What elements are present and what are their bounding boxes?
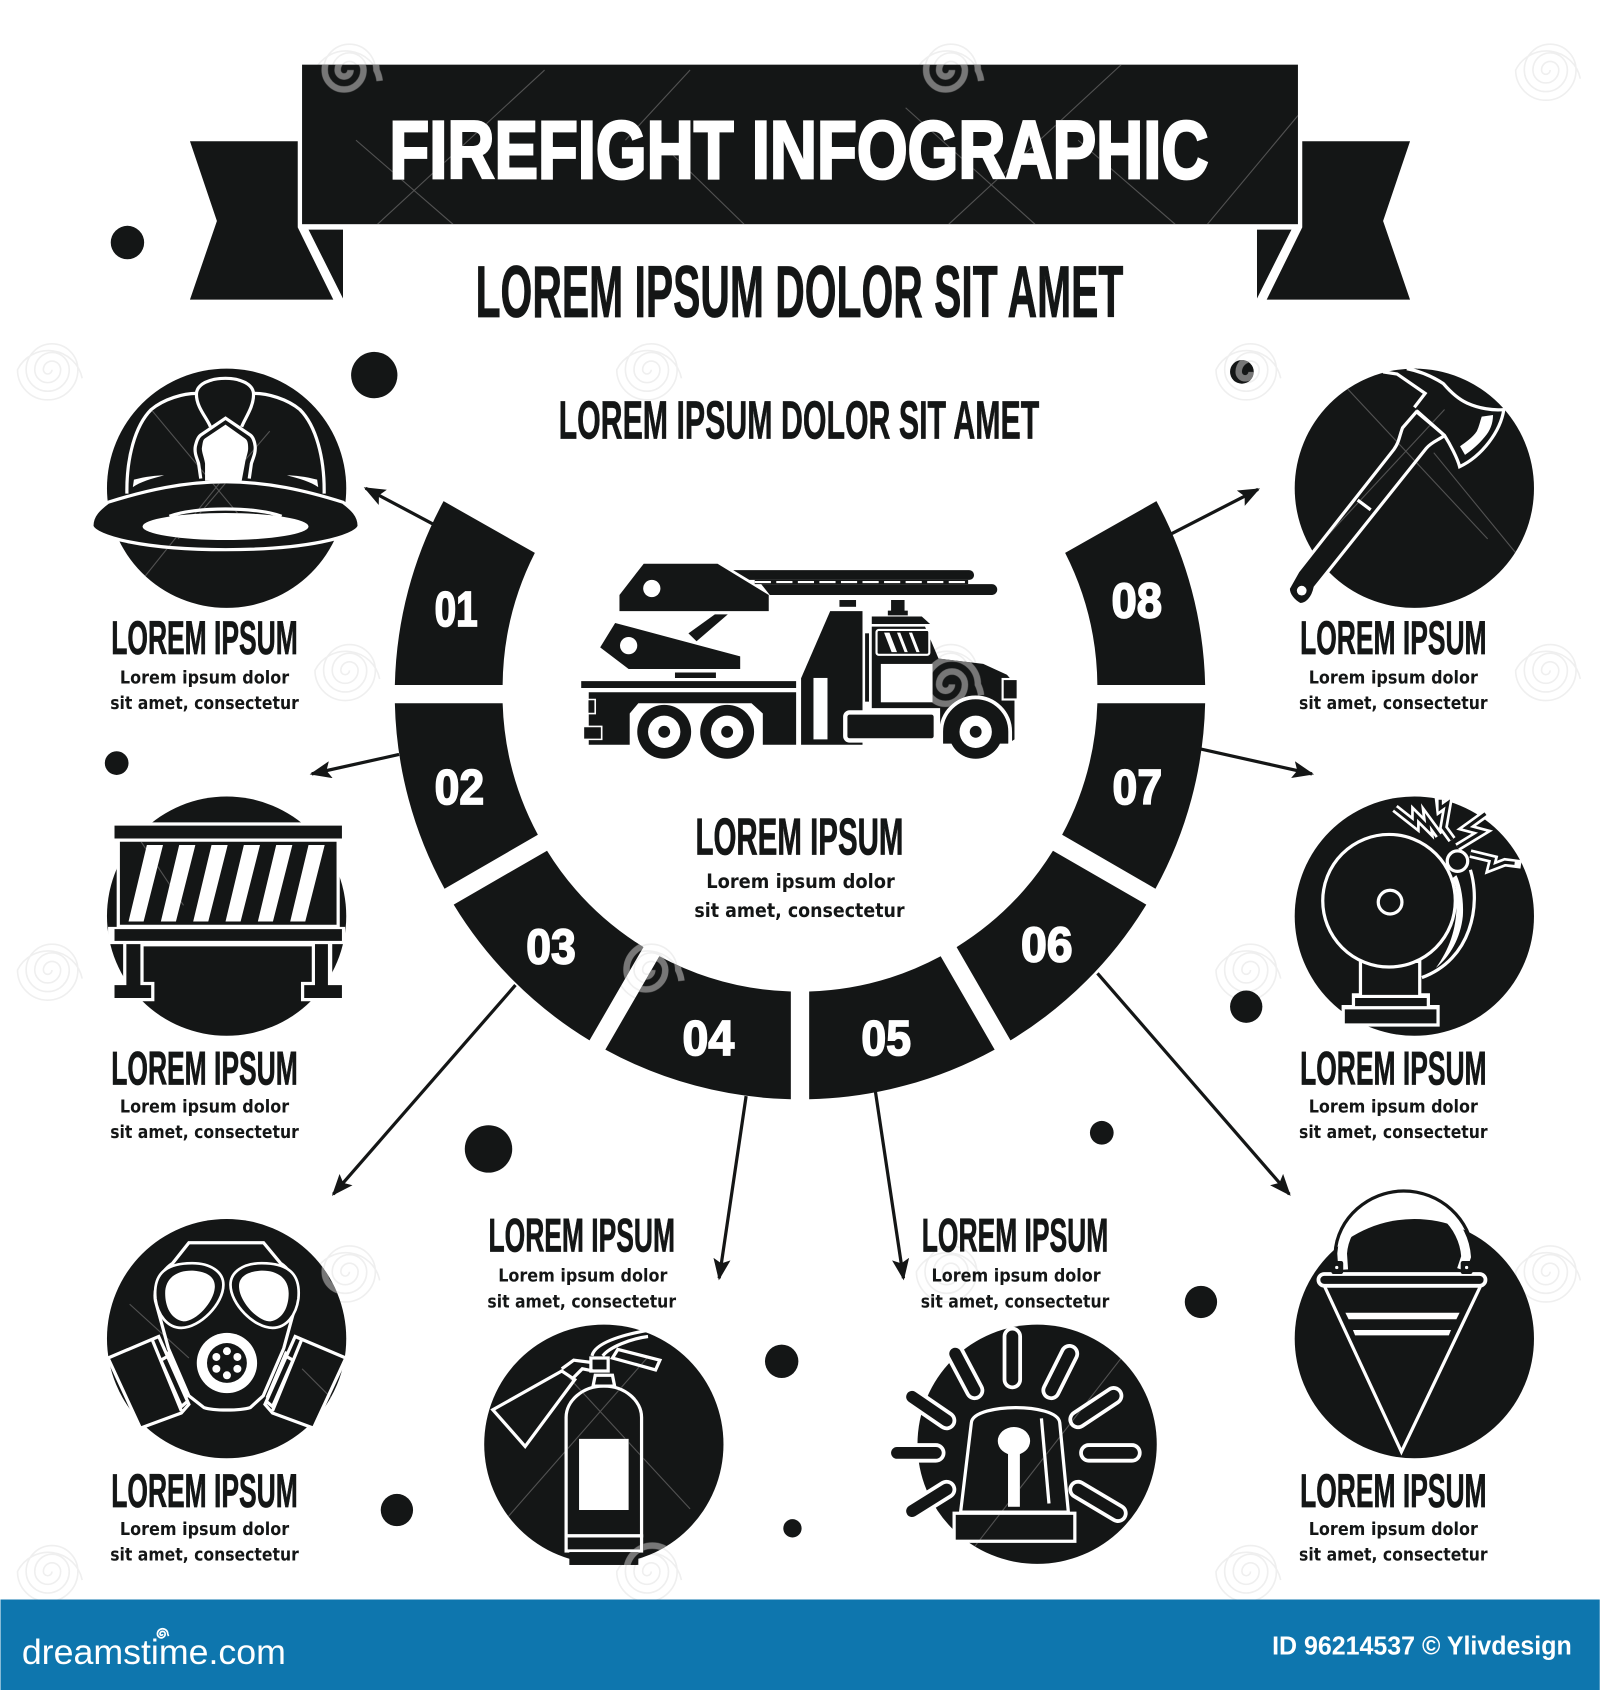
- center body: Lorem ipsum dolor: [706, 870, 895, 893]
- lower boom: [600, 623, 740, 669]
- label 3: sit amet, consectetur: [110, 1545, 299, 1566]
- label 6: sit amet, consectetur: [1299, 1545, 1488, 1566]
- handle outer line: [1335, 1191, 1473, 1270]
- right canister: [265, 1336, 346, 1428]
- label 2: [110, 1042, 299, 1143]
- handle white band: [1342, 1199, 1466, 1270]
- rear wheel 1: [637, 705, 691, 759]
- label 6: [1299, 1465, 1488, 1566]
- icon: bucket: [1295, 1191, 1534, 1458]
- segment 02: [395, 703, 538, 889]
- label 5: LOREM IPSUM: [922, 1209, 1108, 1262]
- icon: helmet: [92, 369, 359, 608]
- label 7: sit amet, consectetur: [1299, 1122, 1488, 1143]
- window: [877, 630, 929, 655]
- icon: fire truck: [581, 564, 1018, 759]
- icon: axe: [1288, 369, 1534, 608]
- filter: [197, 1333, 257, 1393]
- label 5: [921, 1209, 1110, 1312]
- ribbon right tail: [1267, 141, 1410, 300]
- segment 05: 05: [861, 1010, 911, 1066]
- arm: [1436, 875, 1463, 968]
- deck: [581, 673, 796, 688]
- rim: [1318, 1274, 1485, 1286]
- rays: [897, 1336, 1132, 1513]
- strut: [688, 614, 728, 641]
- segment 03: [454, 851, 643, 1040]
- nozzle: [493, 1371, 575, 1446]
- sparks: [1395, 790, 1521, 868]
- arrow 03: [333, 985, 515, 1194]
- segment 02: 02: [435, 759, 484, 815]
- head outlines: [1407, 369, 1504, 467]
- comb: [196, 378, 254, 427]
- label 4: Lorem ipsum dolor: [498, 1266, 668, 1287]
- label 4: sit amet, consectetur: [487, 1291, 676, 1312]
- segment 06: 06: [1021, 916, 1073, 972]
- bell stand: [1343, 961, 1438, 1025]
- blade highlight: [1460, 415, 1493, 455]
- label 5: Lorem ipsum dolor: [931, 1266, 1101, 1287]
- arrow 04: [719, 1096, 746, 1278]
- arrow 08: [1172, 489, 1258, 534]
- white clearing: [108, 822, 345, 1001]
- label 7: Lorem ipsum dolor: [1309, 1096, 1478, 1117]
- arrow 01: [366, 488, 435, 525]
- chassis: [589, 692, 796, 745]
- segment 04: 04: [683, 1010, 735, 1066]
- label 1: Lorem ipsum dolor: [120, 667, 289, 688]
- title ribbon: [190, 65, 1410, 300]
- brim opening: [143, 513, 309, 540]
- section heading: LOREM IPSUM DOLOR SIT AMET: [559, 391, 1039, 451]
- segment 06: [957, 851, 1146, 1040]
- icon: bell: [1295, 790, 1534, 1036]
- rays outline: [897, 1336, 1132, 1513]
- footer band: [0, 1599, 1600, 1690]
- handle hole: [1297, 586, 1307, 595]
- keyhole: [998, 1427, 1030, 1507]
- label 3: [110, 1465, 299, 1566]
- ribbon left fold: [309, 230, 343, 299]
- dome wedges: [133, 475, 318, 487]
- segment 01: 01: [435, 581, 478, 637]
- label 7: [1299, 1042, 1488, 1143]
- center heading: LOREM IPSUM: [695, 808, 903, 866]
- center text block: [694, 808, 905, 922]
- head body: [1397, 369, 1504, 467]
- side step: [845, 712, 936, 740]
- head band: [1383, 372, 1425, 407]
- arrow 02: [312, 754, 399, 774]
- label 4: [487, 1209, 676, 1312]
- handle: [592, 1330, 649, 1356]
- title: FIREFIGHT INFOGRAPHIC: [389, 105, 1208, 196]
- arrow 07: [1201, 749, 1312, 774]
- cab: [872, 627, 1014, 744]
- label 8: sit amet, consectetur: [1299, 693, 1488, 714]
- bands: [1345, 1313, 1460, 1335]
- label 3: LOREM IPSUM: [111, 1465, 298, 1518]
- bell knob: [1447, 851, 1468, 871]
- segment 03: 03: [526, 919, 576, 975]
- icon: barrier: [107, 796, 346, 1036]
- icon: siren: [897, 1325, 1157, 1564]
- brim: [92, 482, 359, 550]
- cylinder: [566, 1386, 642, 1536]
- footer credit: ID 96214537 © Ylivdesign: [1272, 1632, 1572, 1660]
- label 2: LOREM IPSUM: [111, 1042, 298, 1095]
- label 1: [110, 612, 299, 714]
- ladder: [733, 570, 997, 595]
- ribbon main band: [302, 65, 1298, 224]
- door: [881, 664, 933, 702]
- icon: extinguisher: [484, 1325, 723, 1565]
- bell center ring: [1378, 890, 1402, 914]
- segment 07: [1062, 703, 1205, 889]
- segment 08: 08: [1111, 573, 1162, 629]
- label 6: Lorem ipsum dolor: [1309, 1519, 1478, 1540]
- label 5: sit amet, consectetur: [921, 1291, 1110, 1312]
- headlight: [1003, 679, 1018, 699]
- label 8: [1299, 612, 1488, 714]
- label 2: sit amet, consectetur: [110, 1122, 299, 1143]
- lever: [612, 1349, 660, 1370]
- ribbon left tail: [190, 141, 333, 300]
- dome outline: [127, 393, 324, 494]
- segment 01: [395, 501, 535, 685]
- base: [954, 1513, 1075, 1541]
- dome: [961, 1408, 1068, 1512]
- rear lights: [583, 699, 602, 739]
- bucket cone: [1324, 1285, 1481, 1452]
- dome highlight: [1041, 1418, 1049, 1504]
- label 8: Lorem ipsum dolor: [1309, 667, 1478, 688]
- label 1: sit amet, consectetur: [110, 693, 299, 714]
- label 1: LOREM IPSUM: [111, 612, 298, 665]
- stripes: [129, 845, 325, 922]
- center text block: sit amet, consectetur: [694, 899, 905, 922]
- cab roof and beacon: [872, 600, 930, 624]
- neck and valve: [591, 1358, 615, 1386]
- arrow 05: [875, 1092, 903, 1278]
- front wheel: [941, 697, 1010, 759]
- footer logo: dreamstime.com: [22, 1632, 286, 1672]
- segment 04: [605, 956, 791, 1099]
- segment 08: [1065, 501, 1205, 685]
- handle: [1288, 412, 1445, 605]
- badge fill: [202, 425, 248, 481]
- ribbon right fold: [1257, 230, 1291, 299]
- right eye: [230, 1263, 299, 1328]
- label: [579, 1439, 629, 1510]
- segment 07: 07: [1113, 759, 1162, 815]
- upper boom: [619, 564, 769, 611]
- rear tower: [801, 611, 863, 745]
- segment 05: [809, 956, 995, 1099]
- face outline: [155, 1243, 297, 1410]
- label 3: Lorem ipsum dolor: [120, 1519, 289, 1540]
- handle lugs: [1331, 1261, 1473, 1274]
- left eye: [155, 1263, 223, 1328]
- icon: gas mask: [107, 1219, 346, 1458]
- base: [566, 1536, 642, 1551]
- badge outline: [195, 418, 255, 479]
- decorative dots: [105, 226, 1262, 1537]
- label 2: Lorem ipsum dolor: [120, 1096, 289, 1117]
- barrier bars: [115, 826, 342, 998]
- left canister: [108, 1336, 189, 1428]
- bell disc: [1323, 834, 1455, 967]
- rear wheel 2: [700, 705, 754, 759]
- segmented ring: [395, 501, 1205, 1099]
- footer logo spiral: [157, 1629, 168, 1638]
- label 4: LOREM IPSUM: [489, 1209, 675, 1262]
- grip notch: [1358, 500, 1371, 510]
- arrow 06: [1097, 973, 1289, 1194]
